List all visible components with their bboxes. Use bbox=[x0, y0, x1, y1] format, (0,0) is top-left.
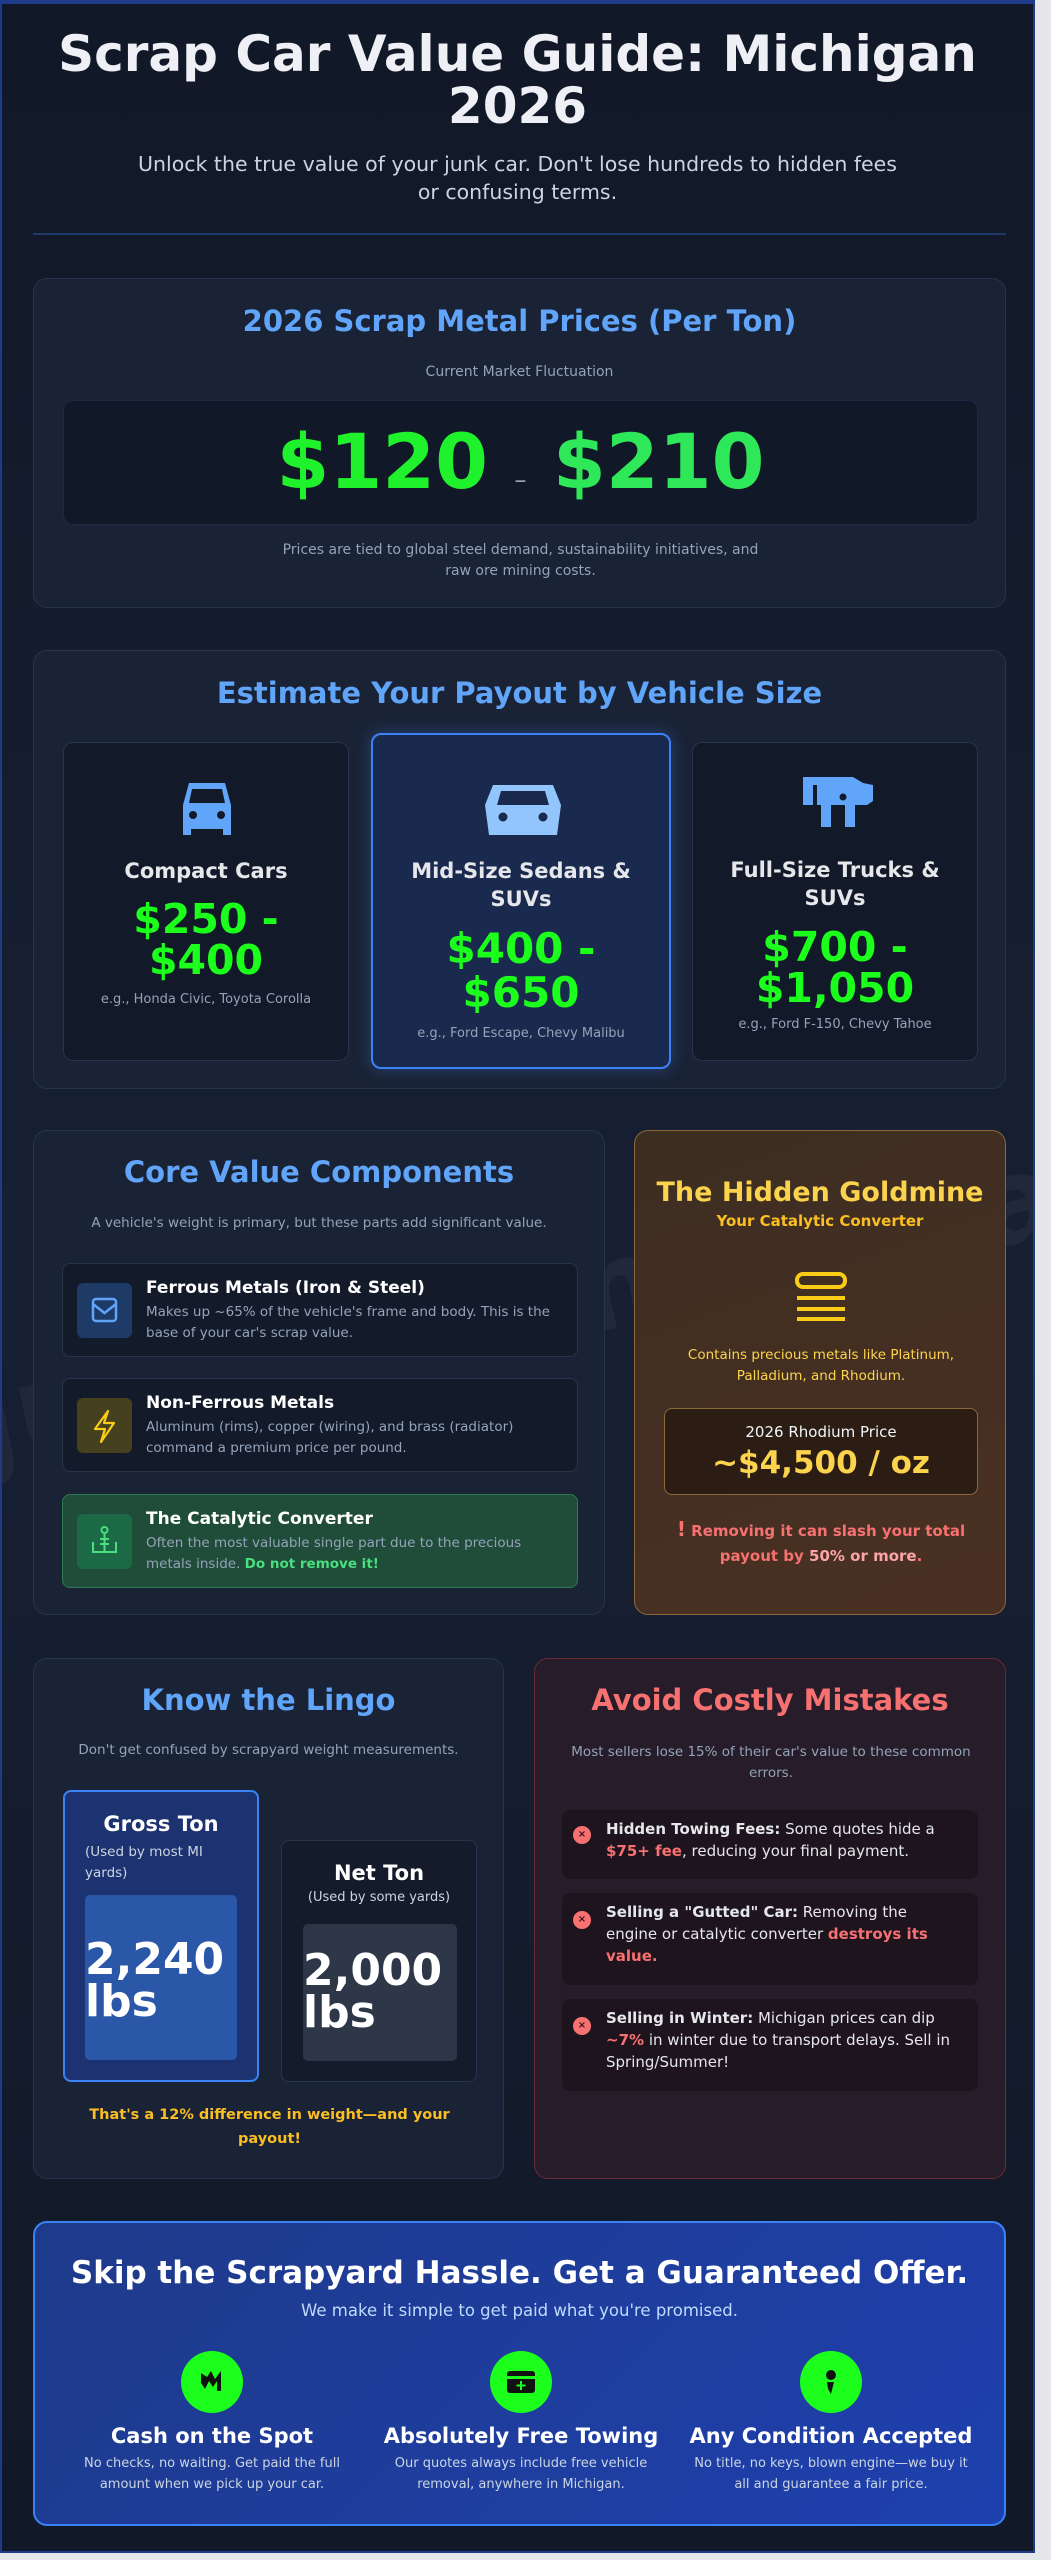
title: Full-Size Trucks & bbox=[730, 858, 940, 882]
mistake: towing fees: Hidden Towing Fees: Some quotes hide a $75+ fee, reducing your final payment. bbox=[606, 1820, 935, 1860]
item: catalytic converter bbox=[62, 1494, 578, 1588]
example: e.g., Ford Escape, Chevy Malibu bbox=[417, 1026, 625, 1041]
description: Contains precious metals like Platinum, Palladium, and Rhodium. bbox=[688, 1347, 954, 1384]
subheading: Your Catalytic Converter bbox=[717, 1212, 923, 1230]
icon: cash bbox=[181, 2351, 243, 2413]
item: catalytic converter: Often the most valuable single part due to the precious metals inside. Do not remove it! bbox=[146, 1535, 521, 1572]
title: Mid-Size Sedans & bbox=[411, 859, 631, 883]
title bbox=[411, 859, 631, 911]
subtitle: Unlock the true value of your junk car. Don't lose hundreds to hidden fees bbox=[138, 152, 897, 176]
card: gross ton bbox=[63, 1790, 259, 2082]
price bbox=[133, 895, 279, 984]
price: $400 - bbox=[447, 924, 595, 973]
icon: bolt bbox=[77, 1398, 132, 1453]
item: non-ferrous metals bbox=[62, 1378, 578, 1472]
item: ferrous metals: Ferrous Metals (Iron & Steel) bbox=[146, 1278, 425, 1298]
title: SUVs bbox=[805, 886, 865, 910]
feature: cash: No checks, no waiting. Get paid the full amount when we pick up your car. bbox=[84, 2456, 340, 2492]
value box: lbs bbox=[85, 1976, 158, 2027]
value box bbox=[85, 1895, 237, 2060]
panel: know the lingo bbox=[33, 1658, 504, 2179]
heading: lingo: Know the Lingo bbox=[142, 1683, 395, 1717]
title: 2026 bbox=[448, 77, 587, 135]
heading: core value: Core Value Components bbox=[124, 1155, 514, 1189]
price: $700 - bbox=[762, 923, 908, 971]
feature: towing: Our quotes always include free vehicle removal, anywhere in Michigan. bbox=[395, 2456, 647, 2492]
card: net ton: Net Ton bbox=[334, 1861, 424, 1885]
feature: any condition: Any Condition Accepted bbox=[690, 2424, 972, 2448]
warning: ! Removing it can slash your total payout by 50% or more. bbox=[677, 1517, 965, 1565]
mistake: towing fees: × bbox=[578, 1829, 586, 1840]
panel: call to action bbox=[33, 2221, 1006, 2526]
subtitle: or confusing terms. bbox=[418, 180, 617, 204]
icon: converter bbox=[77, 1514, 132, 1569]
title: SUVs bbox=[491, 887, 551, 911]
card: net ton bbox=[281, 1840, 477, 2082]
mistake: winter bbox=[562, 1999, 978, 2091]
price: $250 - bbox=[133, 895, 279, 943]
footnote: Prices are tied to global steel demand, sustainability initiatives, and raw ore mining costs. bbox=[283, 542, 758, 579]
subtitle bbox=[138, 152, 897, 204]
card: gross ton: (Used by most MI yards) bbox=[85, 1844, 203, 1881]
label: market fluctuation: Current Market Fluctuation bbox=[426, 364, 613, 380]
heading: payout: Estimate Your Payout by Vehicle Size bbox=[217, 676, 822, 710]
rhodium price box bbox=[664, 1408, 978, 1495]
card: trucks bbox=[692, 742, 978, 1061]
price: $1,050 bbox=[756, 964, 914, 1012]
feature: any condition: No title, no keys, blown engine—we buy it all and guarantee a fair price. bbox=[694, 2456, 968, 2492]
icon: stack bbox=[795, 1272, 847, 1321]
title bbox=[730, 858, 940, 910]
note: That's a 12% difference in weight—and your payout! bbox=[89, 2107, 450, 2147]
item: ferrous metals bbox=[62, 1263, 578, 1357]
panel: hidden goldmine bbox=[634, 1130, 1006, 1615]
panel: core value components bbox=[33, 1130, 605, 1615]
price: $650 bbox=[463, 968, 579, 1017]
intro: Most sellers lose 15% of their car's value to these common errors. bbox=[571, 1744, 971, 1781]
card: net ton: (Used by some yards) bbox=[308, 1890, 450, 1905]
mistake: gutted car: Selling a "Gutted" Car: Removing the engine or catalytic converter destroys its value. bbox=[606, 1903, 928, 1965]
mistake: winter: × bbox=[578, 2020, 586, 2031]
value box: 2,000 bbox=[303, 1945, 442, 1996]
item: non-ferrous metals: Non-Ferrous Metals bbox=[146, 1393, 334, 1413]
feature: cash bbox=[84, 2351, 340, 2492]
price bbox=[756, 923, 914, 1012]
panel: vehicle size payouts bbox=[33, 650, 1006, 1089]
icon: person bbox=[800, 2351, 862, 2413]
title bbox=[58, 25, 977, 135]
card: gross ton: Gross Ton bbox=[103, 1812, 219, 1836]
mistake: gutted car: × bbox=[578, 1914, 586, 1925]
mistake: gutted car bbox=[562, 1893, 978, 1985]
price: $400 bbox=[149, 936, 263, 984]
feature: cash: Cash on the Spot bbox=[111, 2424, 313, 2448]
mistake: winter: Selling in Winter: Michigan prices can dip ~7% in winter due to transport delays. Sell in Spring/Summer! bbox=[606, 2009, 950, 2071]
price range box: $120 – $210 bbox=[276, 417, 764, 506]
item: catalytic converter: The Catalytic Converter bbox=[146, 1509, 373, 1529]
subheading: We make it simple to get paid what you're promised. bbox=[301, 2301, 738, 2320]
price bbox=[447, 924, 595, 1017]
price range box bbox=[63, 400, 978, 525]
card: mid-size (highlighted) bbox=[371, 733, 671, 1069]
title: Scrap Car Value Guide: Michigan bbox=[58, 25, 977, 83]
feature: towing: Absolutely Free Towing bbox=[384, 2424, 658, 2448]
heading: goldmine: The Hidden Goldmine bbox=[656, 1177, 984, 1208]
icon: compact car bbox=[183, 783, 231, 835]
heading: cta: Skip the Scrapyard Hassle. Get a Guaranteed Offer. bbox=[71, 2255, 968, 2291]
item: ferrous metals: Makes up ~65% of the vehicle's frame and body. This is the base of your car's scrap value. bbox=[146, 1304, 550, 1341]
rhodium price box: ~$4,500 / oz bbox=[712, 1445, 930, 1481]
value box: 2,240 bbox=[85, 1934, 224, 1985]
feature: towing bbox=[384, 2351, 658, 2492]
heading: mistakes: Avoid Costly Mistakes bbox=[591, 1683, 949, 1717]
intro: Don't get confused by scrapyard weight measurements. bbox=[78, 1742, 459, 1758]
value box bbox=[303, 1924, 457, 2061]
value box: lbs bbox=[303, 1987, 376, 2038]
item: non-ferrous metals: Aluminum (rims), copper (wiring), and brass (radiator) command a premium price per pound. bbox=[146, 1419, 513, 1456]
title: Compact Cars bbox=[124, 859, 288, 883]
example: e.g., Honda Civic, Toyota Corolla bbox=[101, 992, 311, 1007]
example: e.g., Ford F-150, Chevy Tahoe bbox=[738, 1017, 932, 1032]
rhodium price box: 2026 Rhodium Price bbox=[745, 1423, 897, 1441]
icon: truck bbox=[803, 777, 873, 827]
card: compact cars bbox=[63, 742, 349, 1061]
panel: avoid costly mistakes bbox=[534, 1658, 1006, 2179]
mistake: towing fees bbox=[562, 1810, 978, 1879]
icon: sedan bbox=[485, 785, 561, 835]
icon: envelope bbox=[77, 1283, 132, 1338]
heading: prices: 2026 Scrap Metal Prices (Per Ton) bbox=[243, 304, 796, 338]
icon: towing bbox=[490, 2351, 552, 2413]
intro text: A vehicle's weight is primary, but these parts add significant value. bbox=[91, 1215, 547, 1231]
panel: scrap metal prices bbox=[33, 278, 1006, 608]
feature: any condition bbox=[690, 2351, 972, 2492]
